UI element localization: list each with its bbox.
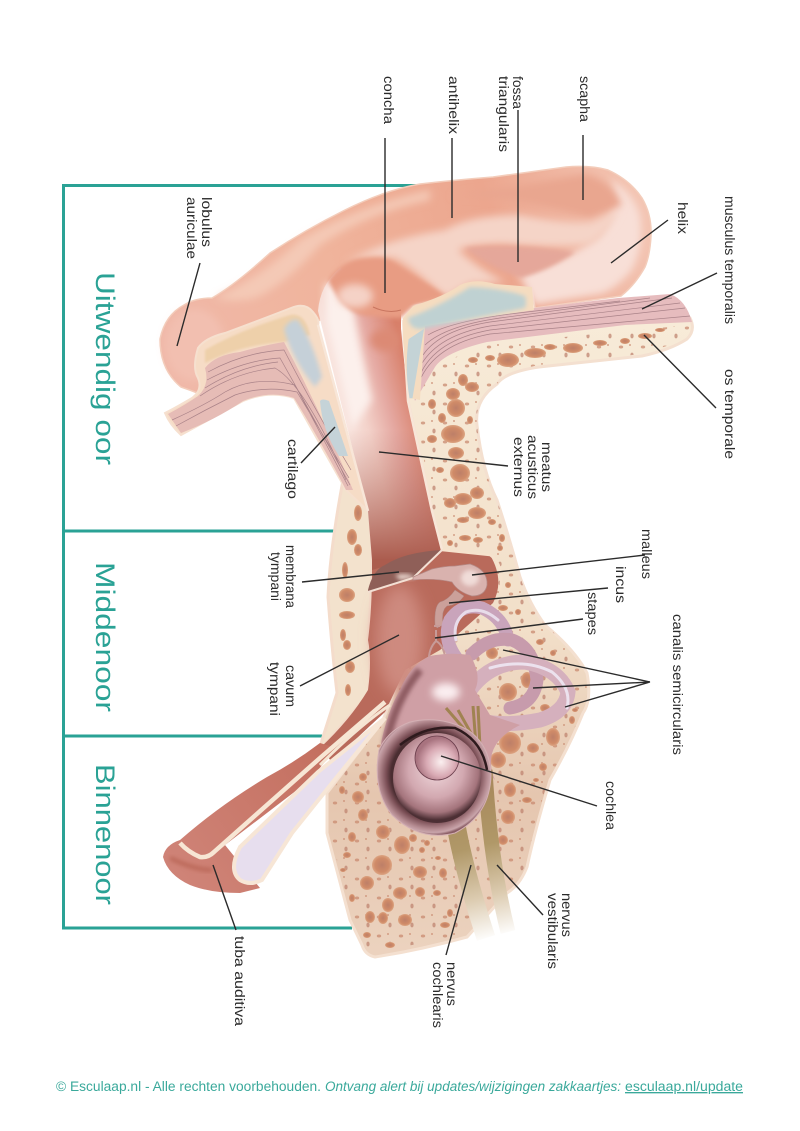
label: cavum tympani: cavum: [283, 665, 298, 707]
vestibule: [378, 654, 520, 780]
label: membrana tympani: [268, 545, 298, 608]
nerves: [446, 706, 508, 938]
label: membrana tympani: membrana: [283, 545, 298, 608]
label: fossa triangularis: [496, 76, 525, 152]
label: antihelix: antihelix: [446, 76, 461, 134]
canal: anterior: [447, 607, 508, 660]
upper muscle: [408, 294, 692, 401]
footer: © Esculaap.nl - Alle rechten voorbehouden.: [56, 1079, 321, 1094]
label: scapha: scapha: [577, 76, 592, 123]
label: incus: incus: [613, 566, 628, 603]
outer ear: [160, 166, 651, 394]
label: tuba auditiva: tuba auditiva: [232, 936, 247, 1027]
section label: Middenoor: Middenoor: [90, 562, 120, 712]
label: os temporale: os temporale: [722, 369, 737, 459]
stapes: [426, 626, 450, 683]
canal highlight: [325, 282, 372, 430]
malleus: [413, 564, 487, 596]
label: lobulus auriculae: auriculae: [184, 197, 199, 259]
label: nervus vestibularis: nervus: [559, 893, 574, 937]
canal: posterior: [472, 639, 537, 708]
label: cochlea: cochlea: [603, 781, 618, 831]
section label: Binnenoor: Binnenoor: [90, 764, 120, 905]
footer: esculaap.nl/update: [625, 1079, 743, 1094]
label: meatus acusticus externus: externus: [511, 437, 526, 497]
footer: [56, 1079, 743, 1094]
label: nervus cochlearis: [430, 962, 459, 1028]
label: nervus cochlearis: nervus: [444, 962, 459, 1006]
label: meatus acusticus externus: acusticus: [525, 435, 540, 499]
cochlea: [377, 720, 491, 835]
nerve branches: [446, 706, 488, 790]
fossa triangularis: [465, 246, 575, 278]
scapha: [450, 174, 622, 218]
canal shadow: [370, 329, 400, 351]
label: meatus acusticus externus: [511, 435, 554, 499]
label: membrana tympani: tympani: [268, 552, 283, 601]
label: musculus temporalis: musculus temporalis: [722, 196, 737, 324]
cartilage: blue-grey plates: [284, 281, 534, 456]
label: cartilago: cartilago: [285, 439, 300, 499]
label: stapes: stapes: [585, 592, 600, 635]
antihelix: [345, 208, 620, 298]
concha: [328, 258, 446, 318]
label: cavum tympani: [267, 662, 298, 716]
nervus cochlearis: [456, 825, 486, 938]
label: malleus: malleus: [639, 529, 654, 579]
lower cartilage flap and muscle: [165, 306, 368, 511]
label: canalis semicircularis: canalis semicircularis: [670, 614, 685, 755]
helix lower band: [215, 190, 430, 300]
semicircular canals: [447, 607, 568, 724]
label: nervus vestibularis: [545, 893, 574, 969]
leader lines: [177, 110, 717, 955]
ear canal: [318, 258, 446, 590]
label: nervus cochlearis: cochlearis: [430, 962, 445, 1028]
tuba auditiva: [163, 702, 390, 893]
label: nervus vestibularis: vestibularis: [545, 893, 560, 969]
lobulus: [165, 309, 225, 381]
label: concha: concha: [381, 76, 396, 125]
middle ear cavity: [320, 550, 501, 762]
ear anatomy illustration: [160, 166, 700, 960]
incus: [435, 590, 464, 628]
footer: Ontvang alert bij updates/wijzigingen zakkaartjes:: [325, 1079, 621, 1094]
label: lobulus auriculae: [184, 197, 214, 259]
label: cavum tympani: tympani: [267, 662, 282, 716]
helix rim highlight: [518, 180, 641, 305]
canal: lateral: [470, 662, 568, 724]
temporal bone with marrow spots: [320, 318, 700, 960]
section label: Uitwendig oor: Uitwendig oor: [90, 272, 120, 465]
nervus vestibularis: [485, 770, 508, 932]
label: meatus acusticus externus: meatus: [539, 442, 554, 492]
label: fossa triangularis: triangularis: [496, 76, 511, 152]
section frame: [63, 186, 420, 928]
eardrum: membrana tympani: [368, 550, 442, 592]
label: fossa triangularis: fossa: [510, 76, 525, 109]
label: helix: helix: [675, 202, 690, 234]
label: lobulus auriculae: lobulus: [199, 197, 214, 247]
